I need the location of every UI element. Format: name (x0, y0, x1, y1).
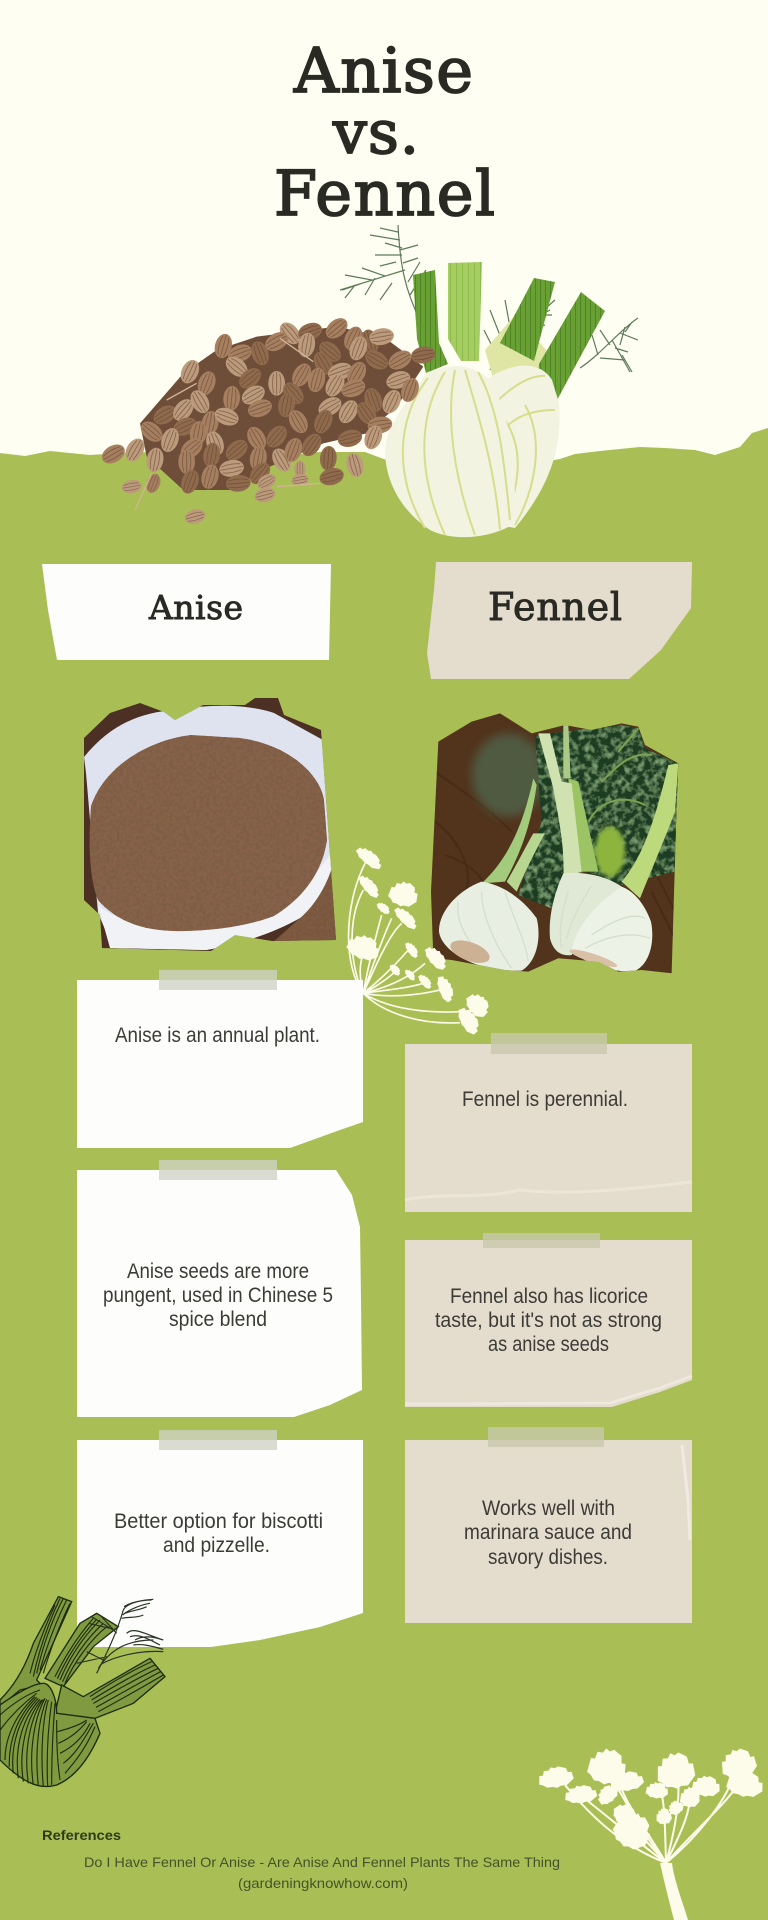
card: pungent seeds: Anise seeds are more (127, 1260, 309, 1283)
wood table (425, 705, 685, 980)
card: pungent seeds (77, 1160, 362, 1417)
anise seed pile (98, 314, 437, 526)
title (274, 34, 495, 230)
umbel flower: middle (270, 843, 494, 1087)
tape (159, 970, 277, 990)
photo: fennel bulbs (425, 705, 685, 980)
card: biscotti: and pizzelle. (163, 1534, 270, 1557)
references heading: References (42, 1828, 121, 1843)
bulbs (439, 882, 539, 971)
title: Fennel (274, 157, 495, 230)
umbel flower: bottom right (537, 1746, 765, 1920)
references text: (gardeningknowhow.com) (238, 1875, 408, 1891)
card: licorice: taste, but it's not as strong (435, 1309, 662, 1332)
illustration: sketched fennel (0, 1597, 165, 1787)
card: licorice (405, 1233, 692, 1407)
tape (488, 1427, 604, 1447)
tape (159, 1430, 277, 1450)
tape (159, 1160, 277, 1180)
card: licorice: Fennel also has licorice (450, 1285, 648, 1308)
bright fronds (595, 827, 625, 877)
references text: Do I Have Fennel Or Anise - Are Anise And Fennel Plants The Same Thing (84, 1854, 560, 1870)
stalks (482, 778, 537, 883)
sparse grey fronds (472, 733, 545, 817)
tape (483, 1233, 600, 1248)
header card: Fennel: Fennel (488, 585, 622, 629)
references text (84, 1854, 560, 1891)
card: marinara: Works well with (482, 1497, 615, 1520)
right bulb (470, 366, 560, 528)
roots (450, 940, 490, 963)
card: perennial: Fennel is perennial. (462, 1088, 628, 1111)
title: Anise (293, 34, 473, 107)
card: licorice: as anise seeds (488, 1333, 609, 1356)
card: pungent seeds: pungent, used in Chinese 5 (103, 1284, 333, 1307)
card: pungent seeds: spice blend (169, 1308, 267, 1331)
dark fronds (518, 725, 678, 908)
tape (491, 1033, 607, 1054)
header card: Anise: Anise (148, 588, 243, 627)
card: biscotti: Better option for biscotti (114, 1510, 323, 1533)
stalks (413, 270, 448, 373)
header card: Anise (42, 564, 331, 660)
title: vs. (332, 98, 419, 168)
header card: Fennel (427, 562, 692, 679)
dill fronds (340, 225, 638, 372)
photo: anise seeds in bowl (84, 698, 336, 951)
card: biscotti (77, 1430, 363, 1647)
back bulb top (485, 315, 555, 385)
illustration: fennel bulb (340, 225, 638, 537)
card: marinara (405, 1427, 692, 1623)
card: marinara: marinara sauce and (464, 1521, 632, 1544)
card: annual plant: Anise is an annual plant. (115, 1024, 320, 1047)
card: perennial (405, 1033, 692, 1212)
cream torn header background (0, 0, 768, 470)
front bulb (385, 366, 515, 537)
card: marinara: savory dishes. (488, 1546, 608, 1569)
card: annual plant (77, 970, 363, 1148)
